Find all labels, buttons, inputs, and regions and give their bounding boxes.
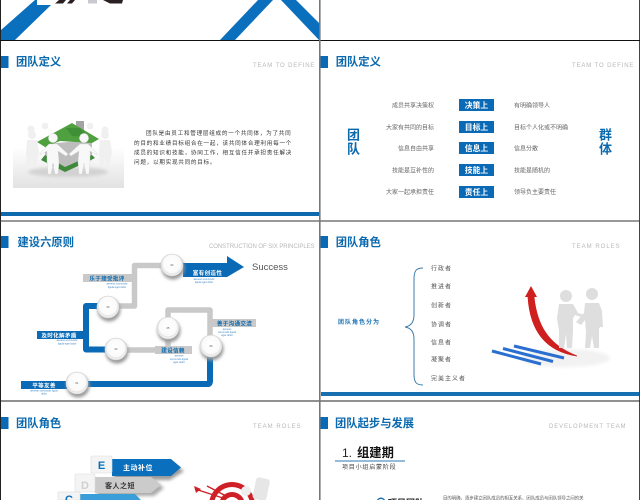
label: communication (208, 319, 256, 337)
text: success: Success (252, 262, 288, 273)
illustration: handshake and arrow (492, 286, 610, 367)
role list: 完美主义者 (431, 374, 466, 382)
group column: 领导负主要责任 (514, 188, 556, 196)
flow paths (80, 266, 210, 384)
step D: 客人之短 (105, 481, 135, 490)
title marker (1, 417, 8, 429)
blue stripe right a (220, 0, 273, 40)
role list: 推进者 (431, 282, 452, 290)
definition paragraph: 团队是由员工和管理层组成的一个共同体，为了共同 (146, 129, 291, 137)
definition paragraph: 的目的和业绩目标组合在一起，该共同体合理利用每一个 (134, 139, 292, 147)
nodes (66, 254, 224, 398)
category column: 责任上 (465, 187, 488, 197)
team column: 大家一起承担责任 (386, 188, 434, 196)
label: equality: aenean commodo ligula (30, 388, 58, 392)
category column: 信息上 (465, 143, 488, 153)
label: accept criticism: 乐于接受批评 (89, 274, 125, 282)
nodes: 02 (115, 347, 118, 351)
category column: 技能上 (465, 165, 488, 175)
subtitle: TEAM TO DEFINE (572, 63, 634, 69)
blue stripe right b (281, 0, 319, 40)
role list: 协调者 (431, 320, 452, 328)
stage title (342, 446, 394, 458)
stage title: 组建期 (357, 445, 394, 460)
decorative blue stripe left (1, 0, 51, 40)
definition paragraph: 问题，以期实现共同的目标。 (134, 158, 216, 166)
label: resolve conflict: 及时化解矛盾 (41, 331, 77, 339)
title marker (320, 56, 328, 68)
label: build trust: 建设信赖 (161, 346, 185, 354)
label: communication: eget dolor (221, 333, 233, 337)
label: communication: 善于沟通交流 (217, 319, 252, 327)
label: communication: aenean (223, 328, 232, 331)
label: accept criticism: aenean commodo (107, 282, 128, 286)
project team label (377, 498, 422, 500)
category column: 目标上 (465, 122, 488, 132)
panel: team vs group comparison (320, 54, 634, 198)
cover image remnant (55, 0, 123, 4)
text: roles divided into: 团队角色分为 (338, 318, 380, 326)
label: build trust: aenean (175, 354, 184, 358)
label: equality: dolor (41, 392, 47, 396)
definition paragraph: 成员的知识和技能，协同工作，相互信任并承担责任解决 (134, 148, 292, 156)
label: accept criticism: ligula eget dolor (108, 285, 126, 289)
role list (431, 264, 466, 382)
blue arrows (492, 346, 564, 364)
role list: 创新者 (431, 302, 452, 310)
title marker (1, 236, 8, 248)
category column: 决策上 (465, 100, 488, 110)
role list: 信息者 (431, 338, 452, 346)
illustration: people around a house (13, 120, 124, 188)
label: resolve conflict: ligula eget dolor (58, 342, 76, 346)
figures (557, 288, 603, 348)
subtitle: TEAM ROLES (572, 244, 621, 250)
illustration: target and figure (194, 477, 270, 500)
label: team: 队 (347, 142, 360, 156)
label: creativity: aenean commodo (194, 277, 215, 281)
panel: team development (320, 416, 626, 500)
label: accept criticism (83, 274, 132, 289)
category column (459, 99, 494, 198)
label: group: 群 (599, 128, 612, 142)
nodes: 04 (171, 263, 174, 267)
title marker (320, 417, 328, 429)
group column: 技能是随机的 (514, 166, 550, 174)
panel: six principles (1, 235, 315, 398)
panel: team roles steps (1, 416, 302, 500)
stage underline (335, 460, 405, 462)
step E: E (98, 460, 105, 472)
group column: 信息分散 (514, 144, 538, 152)
definition paragraph (134, 129, 292, 166)
nodes: 06 (210, 344, 213, 348)
label: communication: commodo ligula (218, 330, 237, 334)
label: creativity: 富有创造性 (193, 269, 222, 277)
red arrow (528, 297, 577, 356)
group column: 目标个人化或不明确 (514, 124, 568, 132)
heading: 团队角色 (336, 235, 381, 249)
step E: 主动补位 (123, 463, 153, 472)
heading: 建设六原则 (18, 235, 74, 249)
step D (75, 474, 164, 496)
heading: 团队定义 (336, 54, 382, 68)
label: team: 团 (347, 128, 360, 142)
title marker (320, 236, 328, 248)
label: equality: 平等友善 (32, 381, 56, 389)
label: build trust: commodo ligula (170, 357, 189, 361)
nodes: 03 (107, 305, 110, 309)
bottom bar (321, 392, 639, 396)
label: build trust (155, 346, 192, 364)
team column (386, 102, 434, 196)
subtitle: TEAM ROLES (253, 424, 302, 430)
step C (58, 492, 141, 500)
group column (514, 102, 568, 196)
panel: team definition (1, 54, 319, 216)
panel: team roles list (320, 235, 639, 396)
title marker (1, 56, 8, 68)
label: resolve conflict (37, 331, 83, 346)
nodes: 05 (167, 326, 170, 330)
label: equality (21, 381, 67, 396)
step E (91, 456, 184, 480)
label: group: 体 (599, 142, 612, 156)
label: creativity: ligula eget dolor (195, 280, 213, 284)
label: build trust: eget dolor (173, 360, 185, 364)
team column: 信息自由共享 (398, 144, 434, 152)
subtitle: CONSTRUCTION OF SIX PRINCIPLES (209, 244, 315, 250)
brace (405, 268, 423, 385)
heading: 团队角色 (16, 416, 61, 430)
group column: 有明确领导人 (514, 102, 550, 110)
stage title: 1. (342, 446, 352, 460)
role list: 行政者 (431, 264, 452, 272)
team column: 大家有共同的目标 (386, 124, 434, 132)
subtitle: DEVELOPMENT TEAM (549, 424, 626, 430)
heading: 团队起步与发展 (335, 416, 414, 430)
team column: 技能是互补性的 (392, 166, 434, 174)
heading: 团队定义 (16, 54, 62, 68)
step D: D (81, 480, 89, 492)
team column: 成员共享决策权 (392, 102, 434, 110)
role list: 凝聚者 (431, 356, 452, 364)
subtitle: TEAM TO DEFINE (253, 63, 315, 69)
bottom bar (1, 212, 319, 216)
label: creativity (193, 269, 222, 284)
stage subtitle: 项目小组启蒙阶段 (342, 463, 396, 471)
arrow: to success (183, 256, 244, 277)
label: resolve conflict: aenean commodo (57, 338, 78, 342)
nodes: 01 (76, 381, 79, 385)
panel: cover slide remnant left (1, 0, 319, 40)
